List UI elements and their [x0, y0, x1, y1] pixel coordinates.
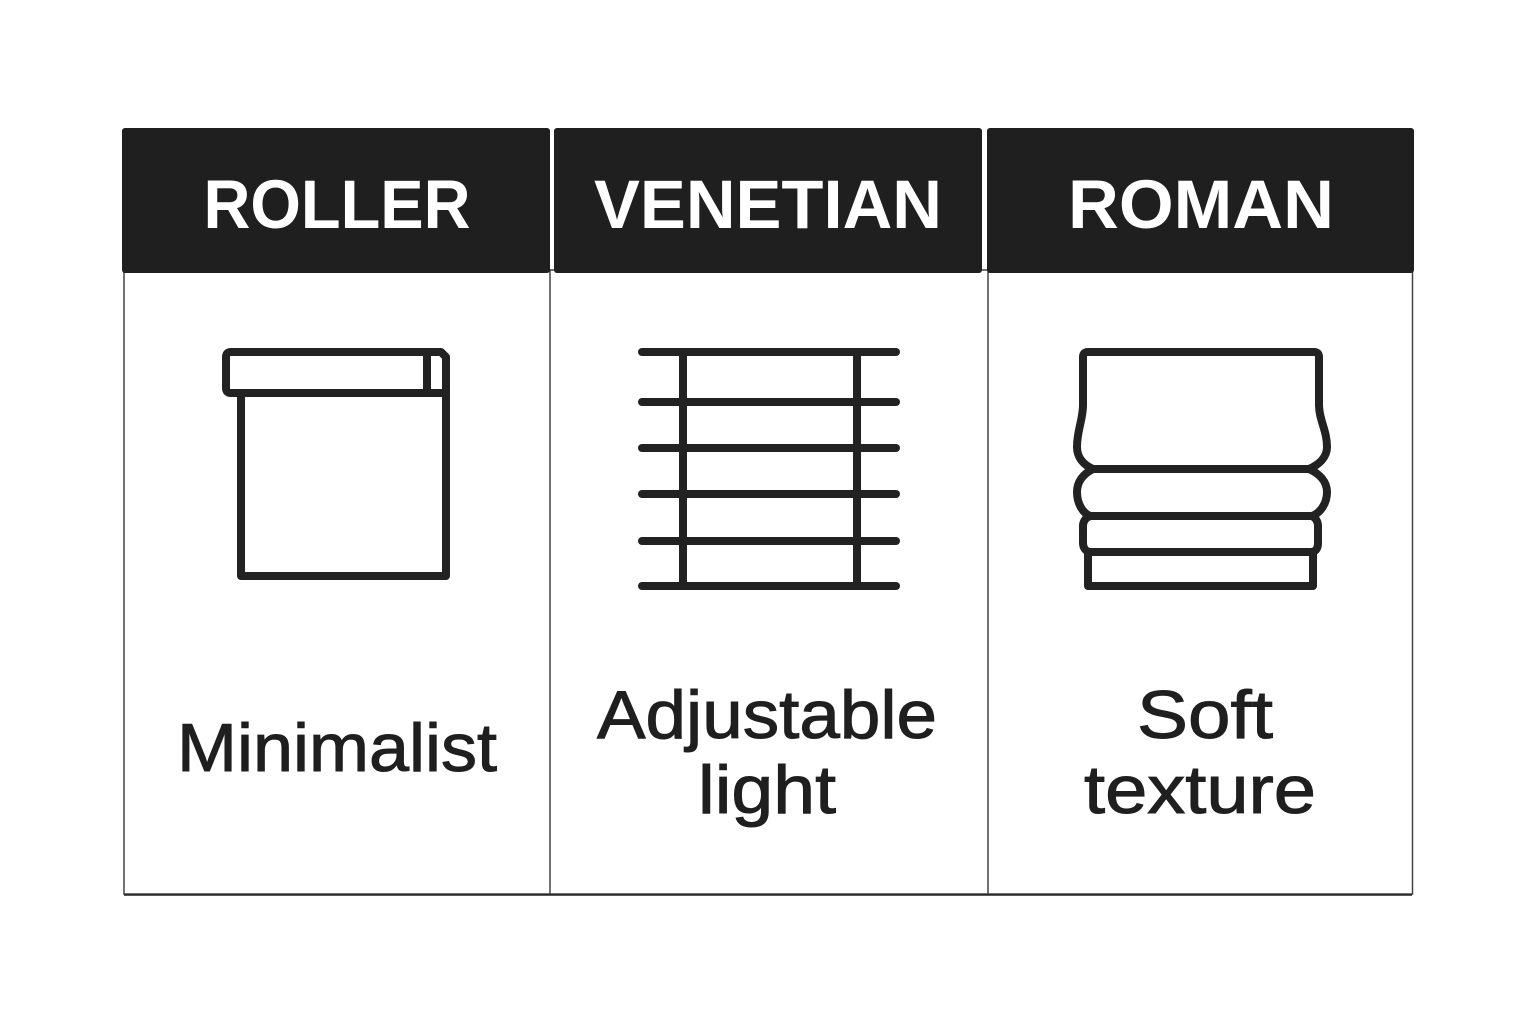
description: venetian	[597, 677, 937, 828]
description: roller: Minimalist	[177, 710, 497, 786]
description: roman: texture	[1084, 752, 1316, 828]
icon: roller blind	[226, 352, 446, 576]
description: roman	[1084, 677, 1316, 828]
header: roman: ROMAN	[1068, 166, 1334, 243]
panel: venetian	[554, 128, 982, 828]
icon: roman blind	[1077, 352, 1327, 586]
panel: roman	[987, 128, 1414, 828]
panel: roller	[122, 128, 550, 786]
header: roller: ROLLER	[204, 166, 470, 243]
description: venetian: light	[698, 752, 836, 828]
icon: venetian blind	[642, 352, 896, 586]
header: venetian	[554, 128, 982, 273]
header: roman	[987, 128, 1414, 273]
description: venetian: Adjustable	[597, 677, 937, 753]
header: roller	[122, 128, 550, 273]
panel frame	[124, 270, 1412, 895]
header: venetian: VENETIAN	[594, 166, 942, 243]
description: roman: Soft	[1137, 677, 1273, 753]
